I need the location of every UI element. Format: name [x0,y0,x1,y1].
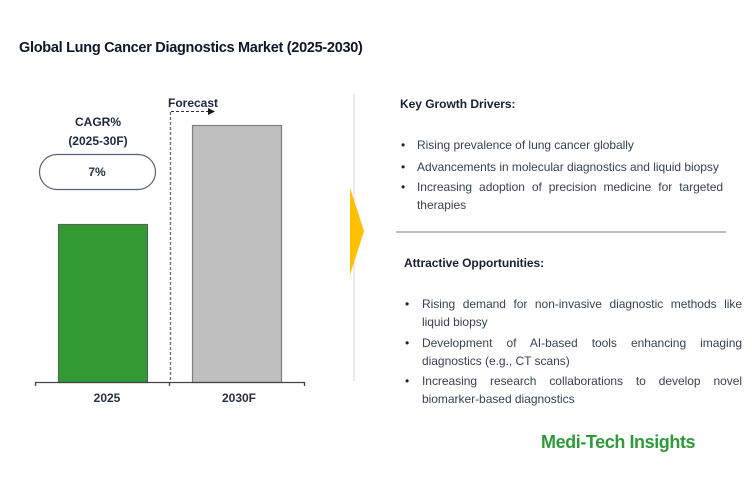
opportunities list: Development of AI-based tools enhancing imaging [422,336,742,350]
drivers list [401,138,723,212]
opportunities list: liquid biopsy [422,315,488,329]
CAGR label [68,115,128,148]
CAGR value: 7% [88,165,106,179]
drivers list: therapies [417,198,466,212]
horizontal divider [396,231,726,233]
forecast label: Forecast [168,96,218,110]
drivers list: • [401,138,405,152]
forecast divider [170,112,172,382]
label: 2025: 2025 [94,391,120,405]
panel: attractive opportunities [404,256,742,406]
CAGR label: CAGR% [75,115,121,129]
panel: key growth drivers [400,97,723,212]
heading: Attractive Opportunities: [404,256,544,270]
heading: Key Growth Drivers: [400,97,515,111]
drivers list: • [401,180,405,194]
opportunities list: Rising demand for non-invasive diagnostic methods like [422,297,742,311]
opportunities list: • [405,336,409,350]
opportunities list [405,297,742,406]
vertical divider [353,94,355,381]
opportunities list: • [405,297,409,311]
yellow arrow [350,188,364,275]
axis [36,382,304,386]
label: 2030F: 2030F [222,391,256,405]
logo: Medi-Tech Insights: Medi-Tech Insights [541,432,695,452]
drivers list: Increasing adoption of precision medicine for targeted [417,180,723,194]
CAGR pill [40,154,156,190]
title: Global Lung Cancer Diagnostics Market (2025-2030) [19,40,363,56]
opportunities list: Increasing research collaborations to develop novel [422,374,742,388]
CAGR label: (2025-30F) [68,134,128,148]
bar: 2025 [58,224,148,382]
forecast arrow [171,108,215,115]
opportunities list: • [405,374,409,388]
opportunities list: biomarker-based diagnostics [422,392,575,406]
drivers list: Advancements in molecular diagnostics and liquid biopsy [417,160,719,174]
drivers list: • [401,160,405,174]
opportunities list: diagnostics (e.g., CT scans) [422,354,570,368]
bar: 2030F [192,126,282,382]
drivers list: Rising prevalence of lung cancer globally [417,138,634,152]
